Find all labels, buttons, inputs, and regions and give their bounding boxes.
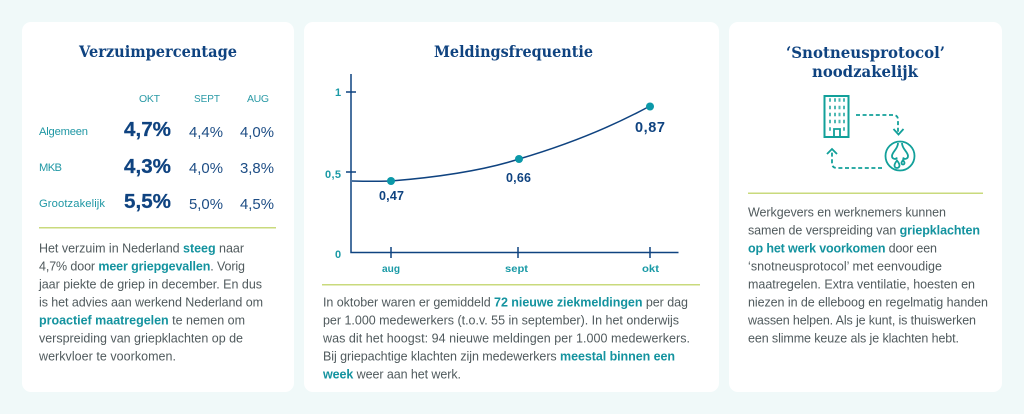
table: absenteeism percentages: 4,0% xyxy=(240,124,274,141)
table: absenteeism percentages: SEPT xyxy=(194,93,221,105)
table: absenteeism percentages: 4,4% xyxy=(189,124,223,141)
table: absenteeism percentages: 4,3% xyxy=(124,156,171,178)
table: absenteeism percentages: 4,0% xyxy=(189,160,223,177)
text block: meldingen explanation: In oktober waren er gemiddeld 72 nieuwe ziekmeldingen per dag xyxy=(323,296,688,310)
line chart: okt xyxy=(642,263,660,275)
heading: snotneusprotocol noodzakelijk xyxy=(786,43,945,81)
table: absenteeism percentages: 4,5% xyxy=(240,196,274,213)
text block: meldingen explanation: per 1.000 medewerkers (t.o.v. 55 in september). In het onderwijs xyxy=(323,314,679,328)
panel: verzuimpercentage xyxy=(22,22,294,392)
text block: protocol explanation xyxy=(747,206,988,346)
heading: meldingsfrequentie: Meldingsfrequentie xyxy=(434,42,593,61)
text block: verzuim explanation: werkvloer te voorkomen. xyxy=(38,350,176,364)
text block: protocol explanation: ‘snotneusprotocol’ met eenvoudige xyxy=(748,260,942,274)
table: absenteeism percentages xyxy=(39,93,274,213)
table: absenteeism percentages: Algemeen xyxy=(39,126,88,138)
heading: snotneusprotocol noodzakelijk: noodzakelijk xyxy=(812,62,919,81)
line chart: 0 xyxy=(335,249,341,261)
table: absenteeism percentages: Grootzakelijk xyxy=(39,198,105,210)
text block: protocol explanation: Werkgevers en werknemers kunnen xyxy=(748,206,946,220)
table: absenteeism percentages: OKT xyxy=(139,93,161,105)
text block: protocol explanation: een slimme keuze als je klachten hebt. xyxy=(748,332,959,346)
text block: protocol explanation: maatregelen. Extra ventilatie, hoesten en xyxy=(748,278,975,292)
table: absenteeism percentages: 4,7% xyxy=(124,119,171,141)
panel: meldingsfrequentie xyxy=(304,22,719,392)
text block: verzuim explanation: proactief maatregelen te nemen om xyxy=(39,314,245,328)
line chart: sept xyxy=(505,263,529,275)
heading: verzuimpercentage: Verzuimpercentage xyxy=(78,42,237,61)
line chart: 0,5 xyxy=(325,169,341,181)
line chart: 0,66 xyxy=(506,171,531,185)
text block: verzuim explanation: is het advies aan werkend Nederland om xyxy=(39,296,263,310)
text block: verzuim explanation: 4,7% door meer griepgevallen. Vorig xyxy=(39,260,245,274)
text block: verzuim explanation: jaar piekte de griep in december. En dus xyxy=(38,278,262,292)
panel: snotneusprotocol xyxy=(729,22,1002,392)
line chart: 1 xyxy=(335,87,341,99)
text block: meldingen explanation: week weer aan het werk. xyxy=(322,368,461,382)
line chart: aug xyxy=(382,263,400,275)
text block: verzuim explanation xyxy=(38,242,263,364)
table: absenteeism percentages: MKB xyxy=(39,162,62,174)
text block: protocol explanation: wassen helpen. Als je kunt, is thuiswerken xyxy=(747,314,976,328)
icon: office building and nose cycle xyxy=(824,96,914,170)
text block: verzuim explanation: Het verzuim in Nederland steeg naar xyxy=(39,242,244,256)
table: absenteeism percentages: AUG xyxy=(247,93,269,105)
text block: protocol explanation: op het werk voorkomen door een xyxy=(748,242,937,256)
heading: snotneusprotocol noodzakelijk: ‘Snotneusprotocol’ xyxy=(786,43,945,62)
text block: verzuim explanation: verspreiding van griepklachten op de xyxy=(39,332,243,346)
text block: meldingen explanation xyxy=(322,296,690,382)
line chart: 0,47 xyxy=(379,189,404,203)
table: absenteeism percentages: 5,0% xyxy=(189,196,223,213)
text block: meldingen explanation: Bij griepachtige klachten zijn medewerkers meestal binnen een xyxy=(323,350,675,364)
line chart: 0,87 xyxy=(635,120,665,136)
table: absenteeism percentages: 3,8% xyxy=(240,160,274,177)
text block: protocol explanation: niezen in de elleboog en regelmatig handen xyxy=(748,296,988,310)
line chart xyxy=(325,74,678,275)
text block: meldingen explanation: was dit het hoogst: 94 nieuwe meldingen per 1.000 medewerkers. xyxy=(322,332,690,346)
table: absenteeism percentages: 5,5% xyxy=(124,191,171,213)
text block: protocol explanation: samen de verspreiding van griepklachten xyxy=(748,224,980,238)
